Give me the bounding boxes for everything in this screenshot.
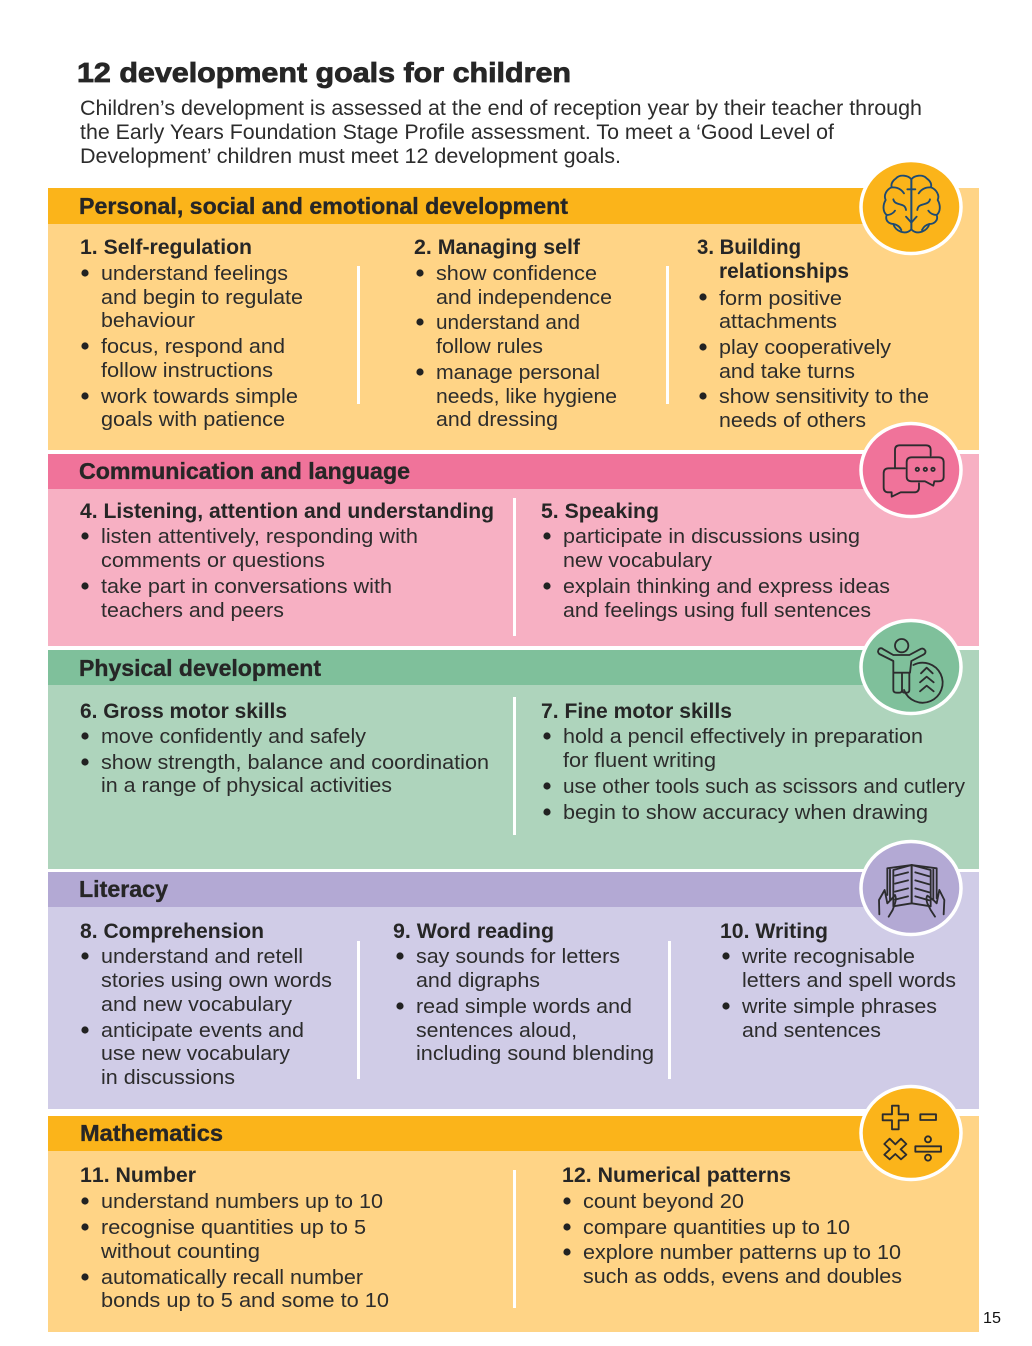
goal 9: word reading: including sound blending [416,1042,654,1065]
goal 7: fine motor skills: begin to show accuracy when drawing [563,801,928,824]
goal 6: gross motor skills: 6. Gross motor skills [80,700,287,723]
goal 10: writing: 10. Writing [720,920,828,943]
goal 11: number: 11. Number [80,1164,196,1187]
goal 7: fine motor skills [541,700,966,824]
goal 3: building relationships: relationships [719,260,849,283]
goal 3: building relationships: 3. Building [697,236,801,259]
goal 3: building relationships: needs of others [719,409,866,432]
goal 8: comprehension: in discussions [101,1066,235,1089]
goal 10: writing: write recognisable [741,945,915,968]
icon: child with ball [861,620,961,714]
goal 8: comprehension: 8. Comprehension [80,920,264,943]
goal 12: numerical patterns: explore number patterns up to 10 [583,1241,901,1264]
goal 3: building relationships: and take turns [719,360,855,383]
goal 5: speaking: explain thinking and express ideas [563,575,890,598]
goal 2: managing self: 2. Managing self [414,236,581,259]
goal 9: word reading: say sounds for letters [416,945,620,968]
goal 1: self-regulation: understand feelings [101,262,288,285]
goal 1: self-regulation [80,236,303,431]
goal 10: writing: write simple phrases [741,995,937,1018]
goal 2: managing self: show confidence [436,262,597,285]
goal 7: fine motor skills: for fluent writing [563,749,716,772]
goal 4: listening, attention and understanding: teachers and peers [101,599,284,622]
goal 8: comprehension: stories using own words [101,969,332,992]
goal 12: numerical patterns: 12. Numerical patterns [562,1164,791,1187]
goal 1: self-regulation: and begin to regulate [101,286,303,309]
panel: physical development [48,650,979,869]
intro text block: Children’s development is assessed at the end of reception year by their teacher through [80,97,922,120]
panel: personal, social and emotional development [48,188,979,450]
goal 11: number [80,1164,389,1312]
goal 6: gross motor skills [80,700,489,797]
panel: mathematics [48,1116,979,1332]
goal 11: number: automatically recall number [101,1266,363,1289]
goal 10: writing: letters and spell words [742,969,956,992]
page number: 15 [983,1310,1001,1327]
goal 1: self-regulation: 1. Self-regulation [80,236,252,259]
icon: brain [861,160,961,254]
goal 5: speaking: new vocabulary [563,549,713,572]
goal 8: comprehension: and new vocabulary [101,993,293,1016]
intro text block: Development’ children must meet 12 development goals. [80,145,621,168]
goal 2: managing self: follow rules [436,335,543,358]
icon: open book with hands [861,842,961,934]
heading: physical development: Physical development [79,655,321,681]
goal 4: listening, attention and understanding: listen attentively, responding with [101,525,418,548]
goal 9: word reading: read simple words and [416,995,632,1018]
goal 11: number: without counting [100,1240,260,1263]
icon: maths symbols [861,1086,961,1180]
heading: personal, social and emotional development: Personal, social and emotional development [79,193,568,219]
goal 6: gross motor skills: show strength, balance and coordination [101,751,489,774]
goal 1: self-regulation: follow instructions [101,359,273,382]
goal 2: managing self: needs, like hygiene [436,385,617,408]
icon: speech bubbles [861,424,961,516]
goal 5: speaking: and feelings using full sentences [563,599,871,622]
goal 4: listening, attention and understanding: 4. Listening, attention and understanding [80,500,494,523]
panel: literacy [48,872,979,1109]
goal 8: comprehension [80,920,332,1089]
goal 1: self-regulation: work towards simple [100,385,298,408]
goal 9: word reading: 9. Word reading [393,920,554,943]
goal 2: managing self: and independence [436,286,612,309]
heading: mathematics: Mathematics [80,1120,223,1146]
goal 2: managing self: manage personal [436,361,600,384]
goal 5: speaking: 5. Speaking [541,500,659,523]
goal 11: number: understand numbers up to 10 [101,1190,383,1213]
goal 4: listening, attention and understanding: take part in conversations with [101,575,392,598]
heading: communication and language: Communication and language [79,458,410,484]
goal 7: fine motor skills: hold a pencil effectively in preparation [563,725,923,748]
goal 8: comprehension: understand and retell [101,945,303,968]
goal 1: self-regulation: behaviour [101,309,195,332]
goal 8: comprehension: use new vocabulary [101,1042,291,1065]
goal 2: managing self: and dressing [436,408,558,431]
goal 12: numerical patterns: such as odds, evens and doubles [583,1265,902,1288]
goal 5: speaking: participate in discussions using [563,525,860,548]
goal 4: listening, attention and understanding [80,500,494,622]
goal 3: building relationships: form positive [719,287,842,310]
goal 8: comprehension: anticipate events and [101,1019,304,1042]
goal 12: numerical patterns: count beyond 20 [583,1190,744,1213]
panel: communication and language [48,454,979,646]
goal 6: gross motor skills: in a range of physical activities [101,774,392,797]
goal 2: managing self: understand and [436,311,580,334]
goal 3: building relationships: play cooperatively [719,336,892,359]
goal 7: fine motor skills: 7. Fine motor skills [541,700,732,723]
goal 1: self-regulation: focus, respond and [101,335,285,358]
goal 5: speaking [541,500,890,622]
goal 4: listening, attention and understanding: comments or questions [101,549,325,572]
goal 3: building relationships: attachments [719,310,837,333]
goal 11: number: bonds up to 5 and some to 10 [101,1289,389,1312]
goal 1: self-regulation: goals with patience [101,408,285,431]
goal 10: writing: and sentences [742,1019,881,1042]
heading: literacy: Literacy [79,876,168,902]
goal 12: numerical patterns: compare quantities up to 10 [583,1216,850,1239]
intro text block: the Early Years Foundation Stage Profile assessment. To meet a ‘Good Level of [80,121,834,144]
goal 3: building relationships: show sensitivity to the [719,385,929,408]
goal 10: writing [720,920,956,1042]
goal 9: word reading: and digraphs [416,969,540,992]
intro text block [80,97,922,168]
goal 3: building relationships [697,236,929,432]
goal 7: fine motor skills: use other tools such as scissors and cutlery [563,775,966,798]
goal 9: word reading [393,920,654,1065]
goal 2: managing self [414,236,617,431]
goal 6: gross motor skills: move confidently and safely [101,725,367,748]
goal 11: number: recognise quantities up to 5 [101,1216,366,1239]
title: 12 development goals for children [77,57,571,88]
goal 12: numerical patterns [562,1164,902,1288]
goal 9: word reading: sentences aloud, [416,1019,577,1042]
